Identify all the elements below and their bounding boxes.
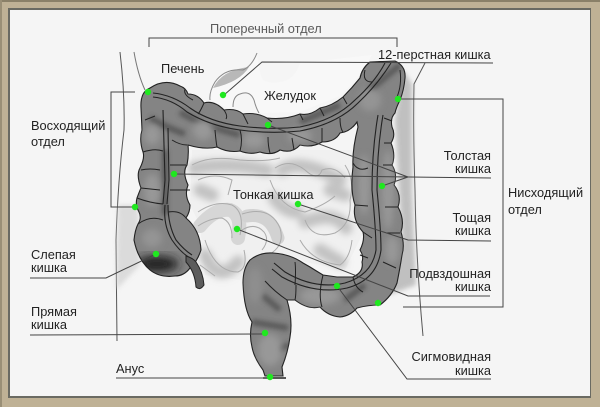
anus bbox=[263, 377, 286, 379]
appendix bbox=[165, 205, 204, 289]
colon body bbox=[134, 61, 405, 376]
label: jejunum: Тощая bbox=[452, 210, 491, 225]
large intestine bbox=[134, 61, 405, 378]
label: transverse: Поперечный отдел bbox=[210, 21, 322, 36]
leader: cecum bbox=[30, 254, 156, 278]
bracket: ascending bbox=[111, 92, 135, 207]
label: rectum: Прямая bbox=[31, 304, 77, 319]
bracket: transverse bbox=[149, 38, 397, 47]
body outlines bbox=[116, 52, 425, 341]
label: small intestine: Тонкая кишка bbox=[233, 187, 314, 202]
label: liver: Печень bbox=[161, 61, 205, 76]
label: sigmoid: кишка bbox=[455, 363, 492, 378]
bracket: descending bbox=[400, 99, 503, 307]
small intestine bbox=[190, 150, 362, 280]
label: rectum: кишка bbox=[31, 317, 68, 332]
haustra folds bbox=[137, 70, 400, 307]
taenia bands bbox=[153, 63, 385, 128]
green markers bbox=[132, 89, 401, 380]
illustration bbox=[116, 52, 425, 378]
stomach bbox=[210, 53, 372, 113]
leader: rectum bbox=[30, 334, 265, 335]
label: large intestine: кишка bbox=[455, 161, 492, 176]
leader: stomach and duodenum bbox=[224, 62, 493, 95]
label: cecum: кишка bbox=[31, 260, 68, 275]
leader: jejunum bbox=[298, 204, 491, 241]
label: large intestine: Толстая bbox=[444, 148, 491, 163]
leader: large intestine bbox=[174, 125, 491, 186]
leader lines bbox=[30, 38, 503, 379]
label: descending: отдел bbox=[508, 202, 542, 217]
label: anus: Анус bbox=[116, 361, 145, 376]
label: descending: Нисходящий bbox=[508, 185, 583, 200]
label: ileum: кишка bbox=[455, 279, 492, 294]
label: ascending: отдел bbox=[31, 134, 65, 149]
label: sigmoid: Сигмовидная bbox=[412, 349, 491, 364]
leader: anus bbox=[116, 377, 270, 379]
label: jejunum: кишка bbox=[455, 223, 492, 238]
label: ascending: Восходящий bbox=[31, 118, 105, 133]
label: stomach: Желудок bbox=[264, 88, 316, 103]
label: ileum: Подвздошная bbox=[409, 266, 491, 281]
leader: sigmoid bbox=[337, 286, 491, 379]
colon shading bbox=[135, 65, 400, 366]
label: cecum: Слепая bbox=[31, 247, 76, 262]
label: duodenum: 12-перстная кишка bbox=[378, 47, 491, 62]
leader: ileum bbox=[237, 229, 490, 296]
